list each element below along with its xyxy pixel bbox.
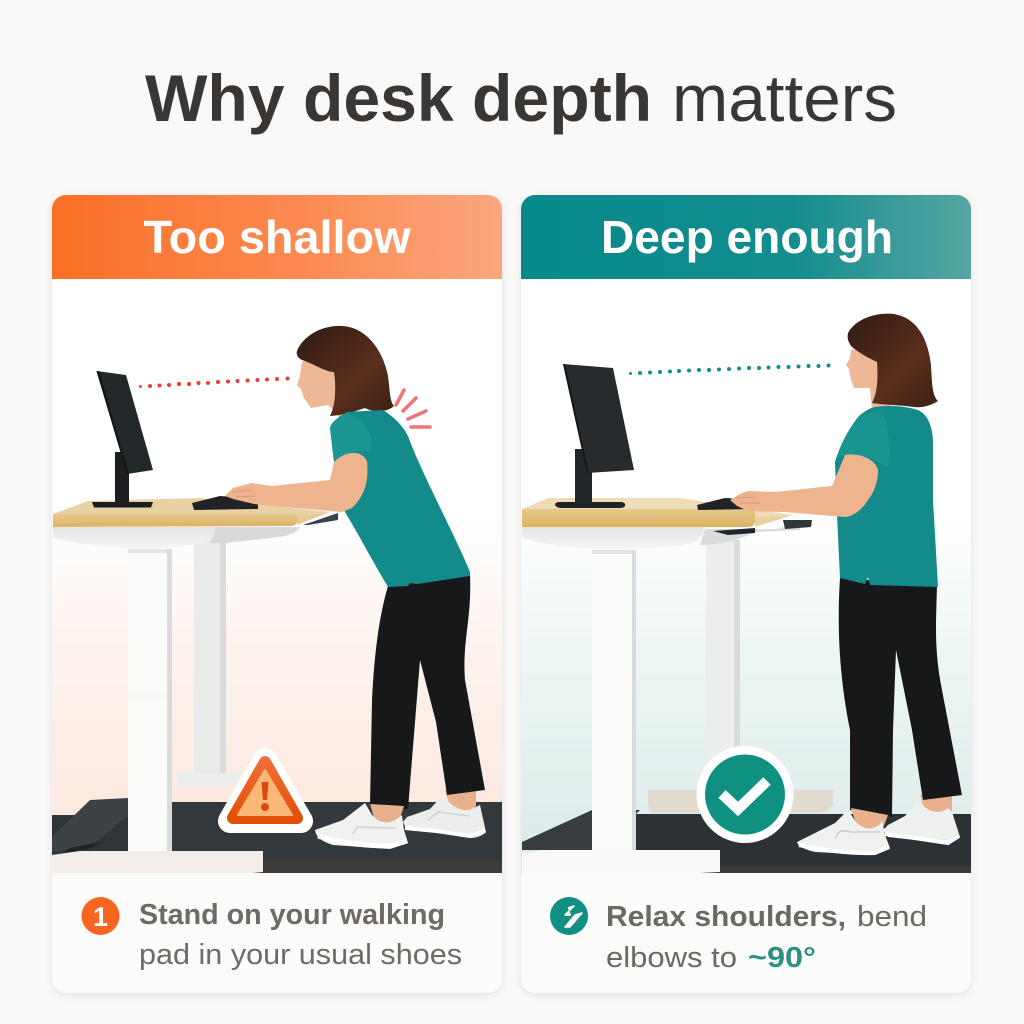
panel card background [52,195,502,993]
finger lines [232,490,256,497]
number badge 2 [550,897,588,935]
face and neck [297,360,342,417]
shirt [330,410,470,587]
beige block behind pad [648,790,833,813]
panel: too shallow [52,195,502,993]
front ankle [370,804,404,824]
legs [839,578,962,817]
neck strain marks [396,390,430,427]
step caption 2 [550,897,927,974]
panel header: deep enough: Deep enough [601,211,893,263]
icon: check badge [696,746,794,843]
hair [848,314,938,407]
icon: warning triangle [230,760,301,821]
caption text: ~90° [748,942,816,974]
caption text: bend [857,901,927,933]
title: matters [672,61,897,135]
front shoe [315,803,408,849]
monitor [555,364,634,508]
front shoe [797,810,890,855]
number badge 1: 1 [93,902,108,932]
desk top [53,498,338,527]
back shoe [883,800,960,845]
desk foot [522,850,720,873]
person standing upright [730,314,962,855]
caption text: pad in your usual shoes [139,939,462,971]
back desk column [178,540,248,786]
finger lines [736,497,760,503]
shirt [835,406,938,587]
front desk column [592,550,636,852]
front desk column [128,549,172,851]
caption text: elbows to [606,942,737,974]
panel header: too shallow: Too shallow [144,211,411,263]
illustration: standing upright at a deep desk [521,279,971,873]
title: Why desk depth [145,61,652,135]
legs [370,574,485,809]
keyboard [697,498,744,510]
hair [297,326,394,416]
panel: deep enough [521,195,971,993]
step caption 1 [82,897,462,971]
arm [225,453,367,512]
illustration: leaning over a shallow desk [52,279,502,873]
arm [730,454,878,517]
back shoe [403,795,486,838]
back ankle [445,790,476,810]
desk foot [52,851,263,873]
panel header: deep enough [521,195,971,279]
line of sight, red dots [139,376,290,388]
line of sight, teal dots [629,364,830,375]
number badge 1 [82,897,120,935]
back desk column [706,540,740,780]
caption text: Relax shoulders, [606,901,846,933]
back ankle [920,794,952,812]
panel card background [521,195,971,993]
face and neck [846,345,895,415]
caption text: Stand on your walking [139,899,445,931]
walking pad [522,810,971,873]
person leaning forward [225,326,486,849]
walking pad [52,798,502,873]
desk underside shell [53,527,300,548]
desk top [522,498,793,527]
keyboard [192,496,258,510]
monitor [92,371,153,508]
panel header: too shallow [52,195,502,279]
desk underside shell [522,520,812,549]
front ankle [851,808,888,828]
